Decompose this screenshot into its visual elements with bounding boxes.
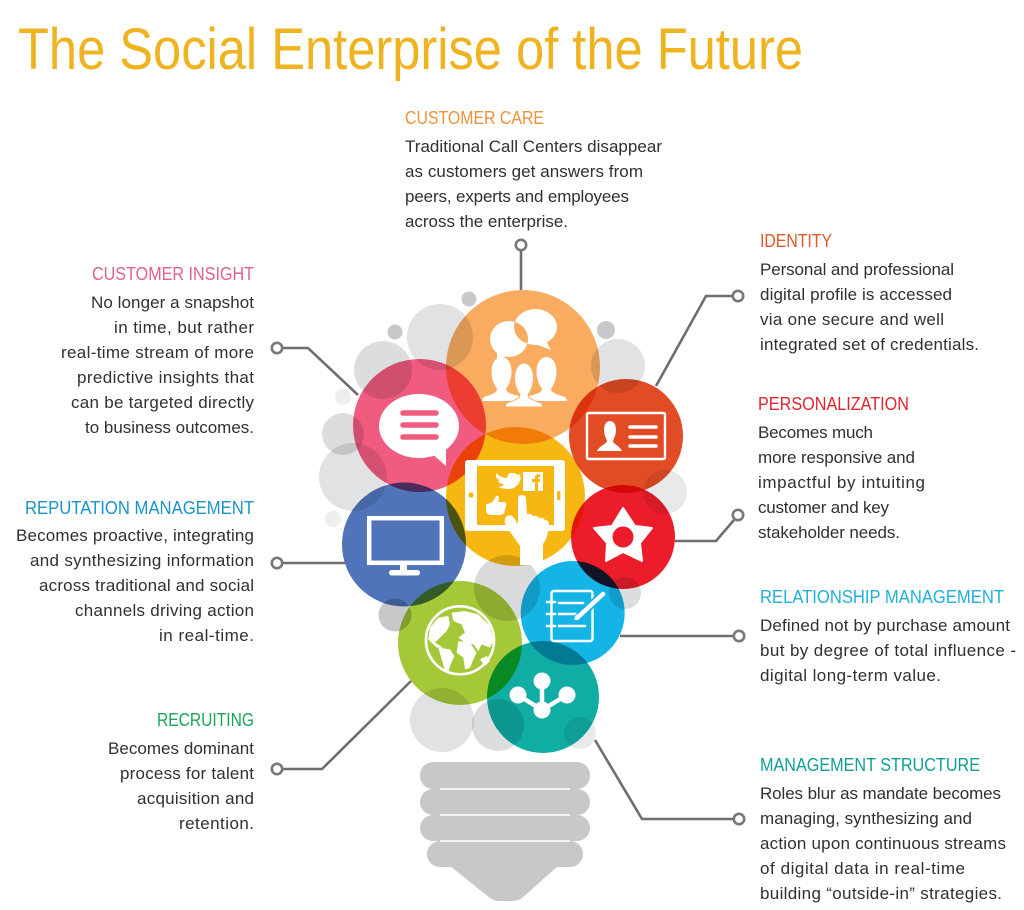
text block: personalization: impactful by intuiting xyxy=(758,473,925,492)
connector: customer care xyxy=(516,240,526,290)
text block: customer insight: CUSTOMER INSIGHT xyxy=(92,264,254,284)
icon: notebook and pen xyxy=(547,591,603,641)
connector: identity xyxy=(656,291,743,386)
text block: identity: via one secure and well xyxy=(760,310,944,329)
text block: personalization xyxy=(758,394,925,542)
text block: relationship management xyxy=(760,587,1016,685)
text block: personalization: stakeholder needs. xyxy=(758,523,900,542)
text block: identity: Personal and professional xyxy=(760,260,954,279)
text block: relationship management: RELATIONSHIP MANAGEMENT xyxy=(760,587,1004,607)
text block: customer insight: predictive insights that xyxy=(77,368,254,387)
title: The Social Enterprise of the Future xyxy=(18,17,803,82)
text block: recruiting xyxy=(108,710,254,833)
text block: reputation management xyxy=(16,498,254,645)
text block: relationship management: digital long-term value. xyxy=(760,666,941,685)
icon: personalization star xyxy=(594,508,652,561)
text block: customer insight: to business outcomes. xyxy=(85,418,254,437)
icon: identity card xyxy=(587,413,665,459)
text block: customer insight: real-time stream of more xyxy=(61,343,254,362)
text block: customer care: across the enterprise. xyxy=(405,212,568,231)
text block: recruiting: retention. xyxy=(179,814,254,833)
text block: management structure: action upon continuous streams xyxy=(760,834,1006,853)
text block: reputation management: across traditional and social xyxy=(39,576,254,595)
text block: management structure xyxy=(760,755,1006,903)
light bulb base xyxy=(420,762,590,901)
text block: reputation management: channels driving action xyxy=(75,601,254,620)
bulb: overlapping circles xyxy=(319,290,687,753)
text block: personalization: more responsive and xyxy=(758,448,915,467)
text block: management structure: building “outside-in” strategies. xyxy=(760,884,1002,903)
text block: customer care: as customers get answers from xyxy=(405,162,643,181)
text block: relationship management: but by degree of total influence - xyxy=(760,641,1016,660)
text block: customer insight: in time, but rather xyxy=(114,318,254,337)
text block: customer insight: can be targeted directly xyxy=(71,393,254,412)
icon: globe xyxy=(426,606,494,674)
text block: customer care: CUSTOMER CARE xyxy=(405,108,544,128)
text block: reputation management: REPUTATION MANAGEMENT xyxy=(25,498,254,518)
icon: customer care people and speech bubbles xyxy=(482,309,567,407)
text block: management structure: Roles blur as mandate becomes xyxy=(760,784,1001,803)
text block: identity: digital profile is accessed xyxy=(760,285,952,304)
text block: management structure: MANAGEMENT STRUCTURE xyxy=(760,755,980,775)
text block: recruiting: process for talent xyxy=(120,764,254,783)
connector: relationship management xyxy=(620,631,744,641)
text block: customer insight xyxy=(61,264,254,437)
connector: reputation management xyxy=(272,558,345,568)
connector: customer insight xyxy=(272,343,358,395)
text block: management structure: managing, synthesizing and xyxy=(760,809,972,828)
text block: customer care: Traditional Call Centers disappear xyxy=(405,137,662,156)
connector: management structure xyxy=(595,740,744,824)
icon: tablet with social media and hand xyxy=(465,460,565,565)
text block: reputation management: and synthesizing information xyxy=(30,551,254,570)
connector: recruiting xyxy=(272,681,411,774)
text block: personalization: Becomes much xyxy=(758,423,873,442)
icon: management network xyxy=(510,672,576,718)
text block: personalization: PERSONALIZATION xyxy=(758,394,909,414)
text block: management structure: of digital data in real-time xyxy=(760,859,965,878)
text block: reputation management: in real-time. xyxy=(159,626,254,645)
text block: customer insight: No longer a snapshot xyxy=(91,293,254,312)
text block: identity: IDENTITY xyxy=(760,231,832,251)
connector: personalization xyxy=(675,510,743,541)
text block: customer care xyxy=(405,108,662,231)
text block: relationship management: Defined not by purchase amount xyxy=(760,616,1010,635)
text block: identity: integrated set of credentials. xyxy=(760,335,979,354)
text block: recruiting: Becomes dominant xyxy=(108,739,254,758)
text block: personalization: customer and key xyxy=(758,498,890,517)
text block: recruiting: acquisition and xyxy=(137,789,254,808)
icon: computer monitor xyxy=(369,518,442,576)
text block: customer care: peers, experts and employees xyxy=(405,187,629,206)
text block: reputation management: Becomes proactive, integrating xyxy=(16,526,254,545)
icon: customer insight speech bubble xyxy=(379,394,459,466)
text block: recruiting: RECRUITING xyxy=(157,710,254,730)
text block: identity xyxy=(760,231,979,354)
